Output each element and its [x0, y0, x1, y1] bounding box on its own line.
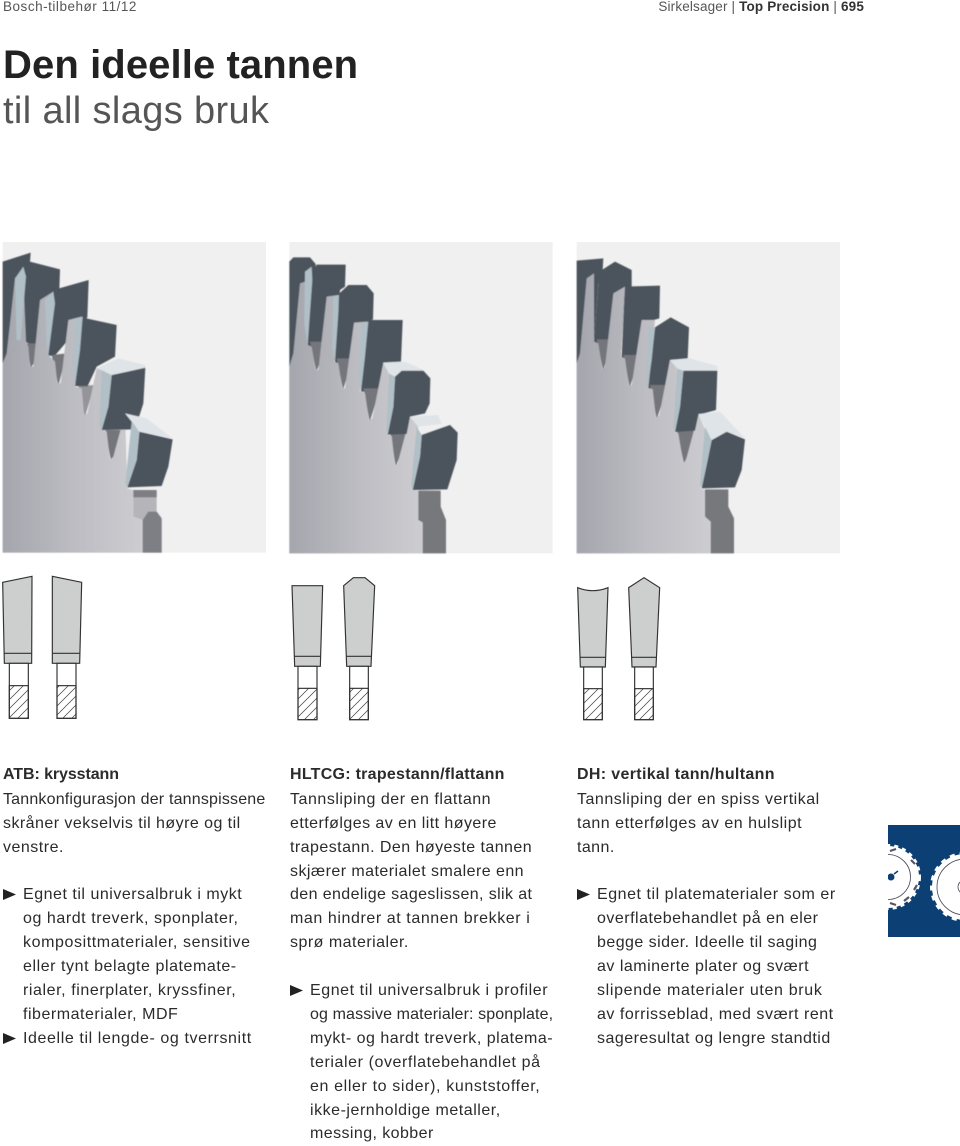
- text column: HLTCG: HLTCG: trapestann/flattann: [290, 766, 505, 783]
- arrow bullet: [3, 889, 16, 900]
- text column: HLTCG: ikke-jernholdige metaller,: [310, 1102, 501, 1119]
- arrow bullet: [577, 889, 590, 900]
- title: til all slags bruk: [3, 90, 269, 132]
- text column: HLTCG: man hindrer at tannen brekker i: [290, 910, 530, 927]
- text column: HLTCG: sprø materialer.: [290, 934, 409, 951]
- text column: HLTCG: Egnet til universalbruk i profiler: [310, 982, 548, 999]
- text column: DH: av forrisseblad, med svært rent: [597, 1006, 834, 1023]
- text column: HLTCG: mykt- og hardt treverk, platema-: [310, 1030, 553, 1047]
- text column: HLTCG: terialer (overflatebehandlet på: [310, 1054, 541, 1071]
- text column: HLTCG: en eller to sider), kunststoffer,: [310, 1078, 540, 1095]
- text column: ATB: eller tynt belagte platemate-: [23, 958, 237, 975]
- text column: DH: [577, 766, 836, 1047]
- text column: HLTCG: den endelige sageslissen, slik at: [290, 886, 532, 903]
- text column: DH: tann.: [577, 839, 615, 856]
- tooth profile diagrams: HLTCG: [291, 577, 376, 720]
- text column: ATB: Ideelle til lengde- og tverrsnitt: [23, 1030, 252, 1047]
- tooth profile diagrams: ATB: [2, 576, 82, 719]
- text column: HLTCG: [290, 766, 553, 1142]
- photo: DH tooth blade: [576, 242, 840, 554]
- arrow bullet: [3, 1033, 16, 1044]
- text column: HLTCG: trapestann. Den høyeste tannen: [290, 839, 532, 856]
- text column: ATB: [3, 766, 265, 1047]
- text column: ATB: Egnet til universalbruk i mykt: [23, 886, 242, 903]
- text column: ATB: rialer, finerplater, kryssfiner,: [23, 982, 236, 999]
- text column: ATB: venstre.: [3, 839, 64, 856]
- title: [3, 43, 358, 132]
- photo: ATB tooth blade: [2, 242, 266, 554]
- text column: ATB: komposittmaterialer, sensitive: [23, 934, 251, 951]
- text column: DH: overflatebehandlet på en eler: [597, 910, 818, 927]
- text column: HLTCG: Tannsliping der en flattann: [290, 791, 491, 808]
- text column: DH: av laminerte plater og svært: [597, 958, 809, 975]
- text column: HLTCG: etterfølges av en litt høyere: [290, 815, 497, 832]
- text column: ATB: Tannkonfigurasjon der tannspissene: [3, 791, 265, 808]
- icon: saw blades on blue tab: [888, 825, 960, 937]
- title: Den ideelle tannen: [3, 43, 358, 87]
- text column: HLTCG: og massive materialer: sponplate,: [310, 1006, 553, 1023]
- text column: ATB: ATB: krysstann: [3, 766, 119, 783]
- text column: HLTCG: messing, kobber: [310, 1125, 434, 1142]
- text column: ATB: skråner vekselvis til høyre og til: [3, 815, 241, 832]
- tooth profile diagrams: DH: [577, 577, 660, 720]
- text column: DH: Egnet til platematerialer som er: [597, 886, 836, 903]
- text column: DH: begge sider. Ideelle til saging: [597, 934, 817, 951]
- text column: ATB: og hardt treverk, sponplater,: [23, 910, 238, 927]
- photo: HLTCG tooth blade: [288, 242, 552, 554]
- text column: DH: Tannsliping der en spiss vertikal: [577, 791, 820, 808]
- arrow bullet: [290, 985, 303, 996]
- text column: DH: tann etterfølges av en hulslipt: [577, 815, 802, 832]
- text column: ATB: fibermaterialer, MDF: [23, 1006, 178, 1023]
- text column: HLTCG: skjærer materialet smalere enn: [290, 863, 524, 880]
- text column: DH: slipende materialer uten bruk: [597, 982, 822, 999]
- text column: DH: DH: vertikal tann/hultann: [577, 766, 775, 783]
- text column: DH: sageresultat og lengre standtid: [597, 1030, 831, 1047]
